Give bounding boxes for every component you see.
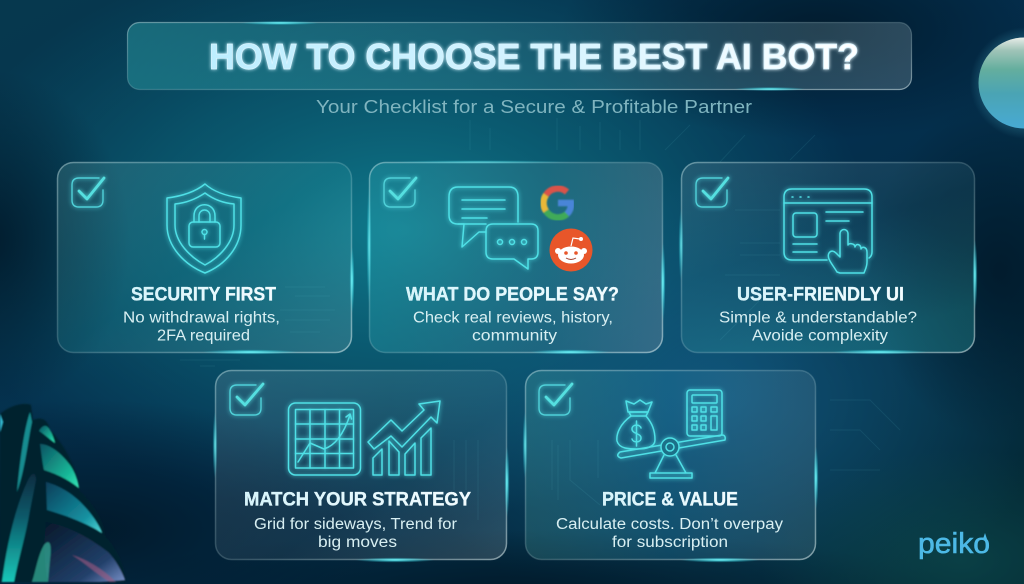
heading: MATCH YOUR STRATEGY (244, 490, 471, 510)
heading: PRICE & VALUE (602, 490, 738, 510)
decorative sphere (978, 38, 1024, 128)
icon: money bag, calculator and scale (617, 390, 725, 478)
subtitle: Your Checklist for a Secure & Profitable Partner (316, 96, 752, 117)
icon: grid chart (288, 403, 360, 475)
description (123, 310, 280, 344)
panel: price and value (522, 370, 818, 562)
icon: checkbox (539, 384, 572, 415)
description (556, 516, 783, 551)
icon: reddit logo (550, 228, 592, 272)
icon: chat bubbles (449, 187, 538, 269)
icon: google logo (543, 189, 571, 217)
logo: peiko: peiko (918, 528, 990, 560)
description: big moves (318, 534, 397, 551)
description: No withdrawal rights, (123, 310, 280, 326)
icon: trend arrow and bars (368, 401, 440, 475)
description: community (472, 328, 557, 344)
icon: checkbox (384, 178, 416, 207)
panel: user-friendly ui (678, 162, 978, 354)
description: Grid for sideways, Trend for (254, 516, 457, 533)
icon: checkbox (72, 178, 104, 207)
decorative plant (0, 404, 125, 582)
description: Avoide complexity (752, 328, 888, 344)
title: HOW TO CHOOSE THE BEST AI BOT? (209, 36, 859, 77)
icon: checkbox (230, 384, 263, 415)
heading: WHAT DO PEOPLE SAY? (406, 284, 619, 306)
description (719, 310, 917, 344)
panel: security first (58, 162, 354, 354)
description: for subscription (612, 534, 728, 551)
icon: checkbox (696, 178, 728, 207)
panel: match your strategy (212, 370, 510, 562)
description (254, 516, 457, 551)
heading: USER-FRIENDLY UI (737, 284, 904, 306)
icon: shield with padlock (167, 184, 241, 273)
icon: browser window with pointer (784, 189, 872, 273)
description: 2FA required (157, 328, 250, 344)
panel: what do people say (366, 160, 666, 354)
title banner (128, 21, 912, 91)
description (413, 310, 613, 344)
description: Simple & understandable? (719, 310, 917, 326)
description: Check real reviews, history, (413, 310, 613, 326)
description: Calculate costs. Don’t overpay (556, 516, 783, 533)
heading: SECURITY FIRST (131, 284, 276, 306)
